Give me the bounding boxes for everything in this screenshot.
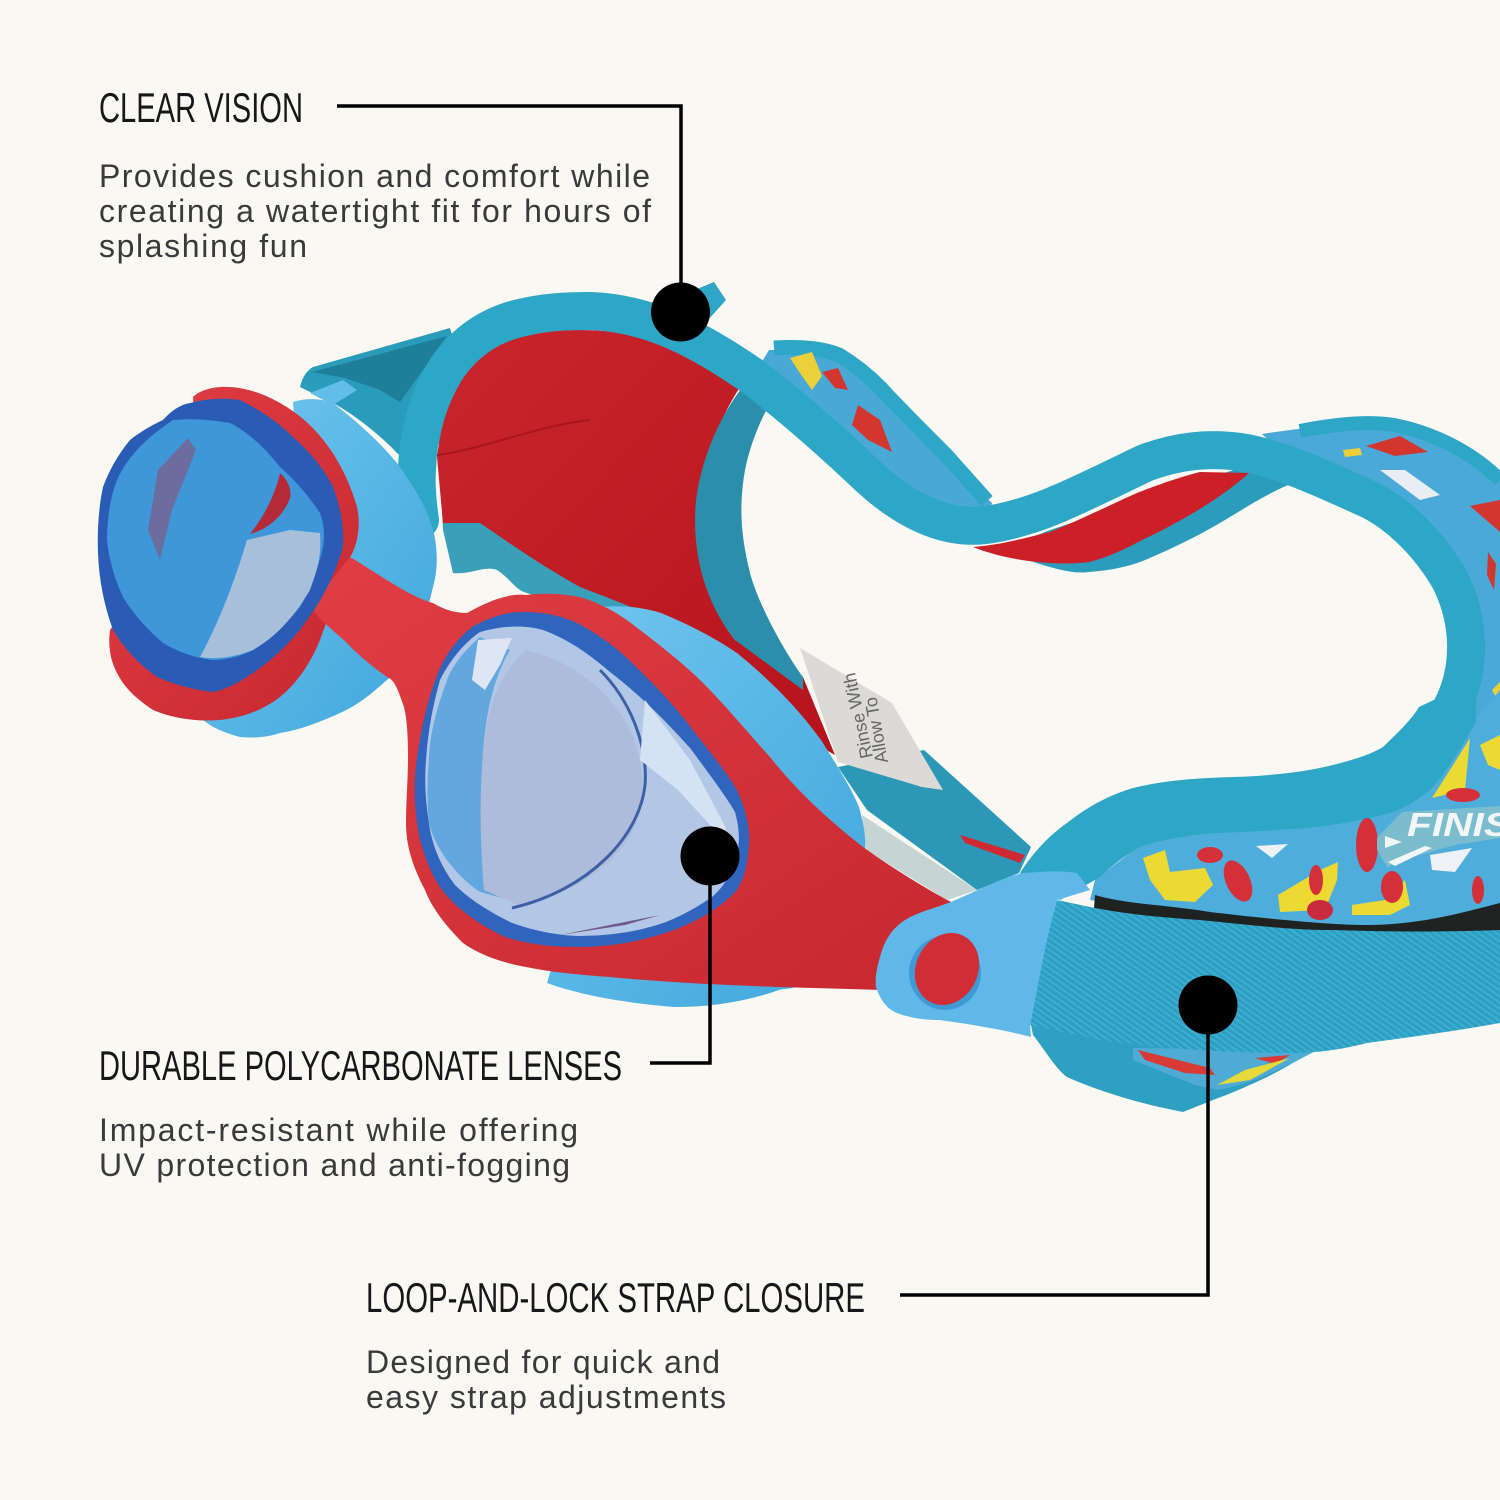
heading: DURABLE POLYCARBONATE LENSES	[99, 1042, 622, 1089]
black lining	[1090, 895, 1500, 960]
back strap dark band	[312, 336, 447, 402]
elastic strap	[1030, 900, 1500, 1053]
inner teal strip	[695, 376, 803, 690]
lower print marks	[1138, 1050, 1290, 1075]
right printed band	[1262, 423, 1500, 760]
upper printed band	[760, 347, 992, 525]
front frame and bridge	[310, 557, 960, 990]
leader line	[650, 856, 710, 1063]
description: splashing fun	[99, 228, 307, 264]
leader line	[337, 106, 681, 312]
lower wrap	[1030, 1020, 1317, 1112]
panel lower teal	[440, 470, 700, 620]
lens highlight	[472, 638, 512, 690]
red strap interior	[973, 472, 1249, 563]
marker	[651, 282, 710, 342]
glass	[425, 626, 739, 936]
logo swoosh	[1385, 836, 1432, 866]
lens light reflection	[640, 700, 726, 838]
description: Provides cushion and comfort while	[99, 158, 650, 194]
heading: CLEAR VISION	[99, 84, 303, 131]
strap connector	[876, 871, 1090, 1037]
logo badge	[1377, 806, 1500, 868]
description: Designed for quick and	[366, 1344, 720, 1380]
red crabs	[1218, 856, 1258, 906]
description	[99, 1112, 578, 1183]
print marks	[790, 352, 822, 390]
red neoprene panel	[437, 330, 835, 755]
care label: Rinse With	[839, 671, 877, 760]
lower print	[1133, 1048, 1317, 1090]
marker	[1178, 976, 1238, 1034]
left frame	[109, 387, 359, 721]
back elastic strap	[300, 328, 470, 470]
brand text: FINIS	[1407, 806, 1500, 843]
main upper trim	[417, 311, 1466, 745]
yellow splashes	[1143, 735, 1500, 915]
callout: clear vision	[99, 84, 710, 342]
lower right teal trim	[1000, 465, 1288, 573]
lens gray reflection	[200, 530, 320, 658]
blue left band	[428, 637, 510, 900]
callout: strap closure	[366, 976, 1238, 1415]
strap red accent	[960, 835, 1025, 863]
back strap loop	[310, 380, 357, 405]
care label	[800, 648, 943, 790]
front cushion	[547, 606, 865, 1007]
description: UV protection and anti-fogging	[99, 1147, 570, 1183]
front lens	[415, 612, 749, 947]
lens lower reflection	[560, 915, 660, 935]
callout: durable lenses	[99, 826, 740, 1183]
description	[99, 158, 651, 264]
description: easy strap adjustments	[366, 1379, 726, 1415]
heading: LOOP-AND-LOCK STRAP CLOSURE	[366, 1274, 865, 1321]
inner lens	[481, 650, 642, 905]
white clouds	[1256, 844, 1472, 872]
leader line	[900, 1005, 1208, 1295]
goggles illustration	[98, 282, 1500, 1112]
panel fold line	[437, 420, 590, 455]
lens red reflection	[250, 473, 291, 534]
gray strap reflection	[862, 815, 977, 900]
description	[366, 1344, 726, 1415]
inner lens edge	[512, 670, 645, 908]
marker	[680, 826, 740, 886]
front printed panel	[1090, 690, 1500, 930]
care label: Allow To	[861, 696, 892, 765]
strap button	[903, 922, 991, 1016]
description: Impact-resistant while offering	[99, 1112, 578, 1148]
left lens	[98, 399, 343, 692]
left cushion	[203, 399, 437, 738]
inner strap behind frame	[838, 750, 1031, 890]
description: creating a watertight fit for hours of	[99, 193, 651, 229]
front trim	[1020, 680, 1476, 900]
trim tab	[690, 282, 726, 320]
front print motifs	[1143, 735, 1500, 920]
print marks	[1366, 436, 1500, 590]
lens purple reflection	[148, 438, 196, 560]
